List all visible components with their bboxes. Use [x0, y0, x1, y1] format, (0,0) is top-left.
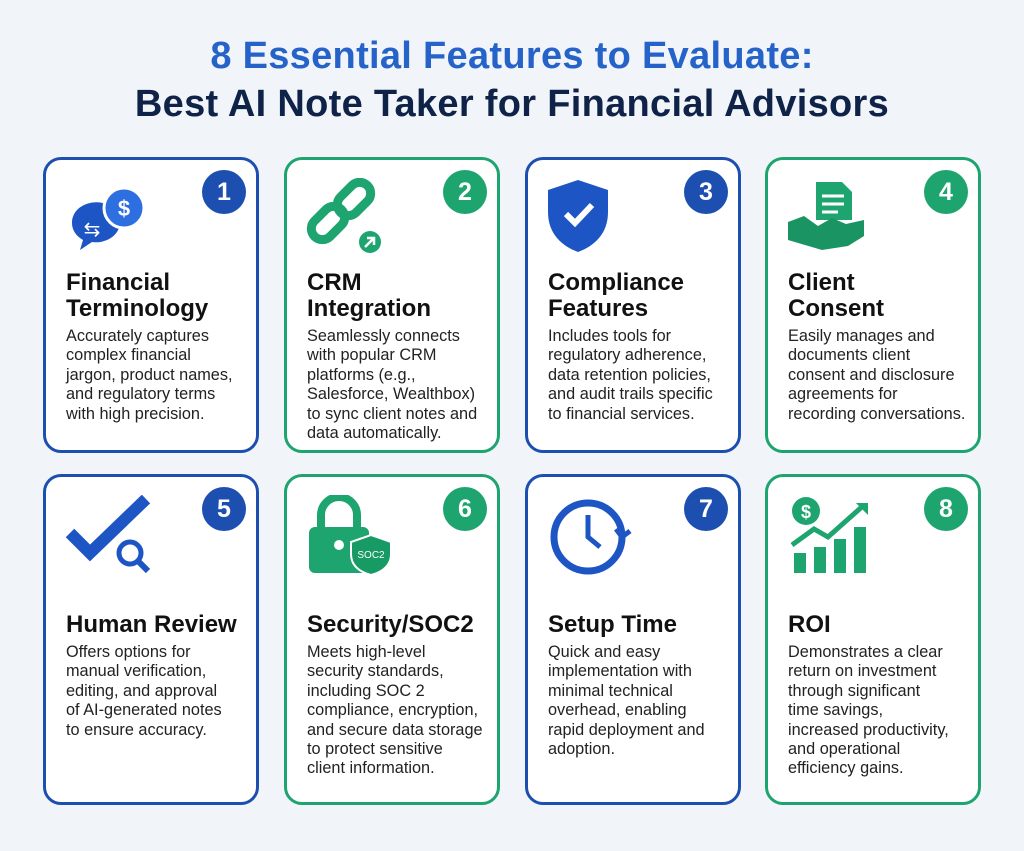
heading: Integration [307, 295, 431, 322]
body text: of AI-generated notes [66, 701, 222, 719]
panel: CRM integration [284, 157, 500, 453]
heading: Consent [788, 295, 884, 322]
icon: growth chart: $ [801, 502, 811, 522]
body text: platforms (e.g., [307, 366, 416, 384]
body text [307, 643, 483, 777]
badge 7 [684, 487, 728, 531]
icon: chain link [306, 178, 381, 253]
body text: Meets high-level [307, 643, 426, 661]
body text: to sync client notes and [307, 405, 477, 423]
badge 4: 4 [939, 178, 953, 206]
body text: Accurately captures [66, 327, 209, 345]
badge 5: 5 [217, 495, 231, 523]
heading [307, 269, 431, 322]
body text: efficiency gains. [788, 759, 904, 777]
body text: and secure data storage [307, 721, 483, 739]
body text: Seamlessly connects [307, 327, 460, 345]
body text [548, 643, 705, 758]
icon: padlock with shield [309, 495, 390, 574]
panel: human review [43, 474, 259, 805]
body text: implementation with [548, 662, 692, 680]
body text [307, 327, 477, 442]
badge 1 [202, 170, 246, 214]
body text: recording conversations. [788, 405, 965, 423]
body text: security standards, [307, 662, 444, 680]
body text: regulatory adherence, [548, 346, 706, 364]
body text: overhead, enabling [548, 701, 687, 719]
body text: to financial services. [548, 405, 695, 423]
icon: padlock with shield: SOC2 [357, 550, 385, 561]
body text [548, 327, 713, 423]
body text [66, 643, 222, 739]
body text: rapid deployment and [548, 721, 705, 739]
body text: complex financial [66, 346, 191, 364]
badge 4 [924, 170, 968, 214]
body text: adoption. [548, 740, 615, 758]
body text: and regulatory terms [66, 385, 215, 403]
title [135, 35, 889, 125]
heading [548, 269, 684, 322]
body text: and operational [788, 740, 900, 758]
body text: client information. [307, 759, 435, 777]
badge 8: 8 [939, 495, 953, 523]
body text: compliance, encryption, [307, 701, 478, 719]
body text: manual verification, [66, 662, 206, 680]
body text: through significant [788, 682, 920, 700]
body text: with high precision. [66, 405, 204, 423]
heading: CRM [307, 269, 362, 296]
heading: Security/SOC2 [307, 611, 474, 638]
heading: ROI [788, 611, 831, 638]
icon: chat bubbles: $ [118, 196, 130, 221]
panel: financial terminology [43, 157, 259, 453]
body text: to ensure accuracy. [66, 721, 207, 739]
badge 8 [924, 487, 968, 531]
body text [788, 643, 949, 777]
icon: chat bubbles: ⇆ [84, 219, 100, 241]
badge 5 [202, 487, 246, 531]
body text: Quick and easy [548, 643, 660, 661]
icon: clock [550, 500, 632, 574]
body text: to protect sensitive [307, 740, 443, 758]
icon: chat bubbles [72, 190, 142, 250]
body text: Salesforce, Wealthbox) [307, 385, 475, 403]
panel: security [284, 474, 500, 805]
body text: data retention policies, [548, 366, 711, 384]
icon: growth chart [790, 497, 868, 573]
heading: Compliance [548, 269, 684, 296]
body text [66, 327, 233, 423]
heading: Setup Time [548, 611, 677, 638]
badge 2: 2 [458, 178, 472, 206]
body text: and audit trails specific [548, 385, 713, 403]
panel: setup time [525, 474, 741, 805]
panel: client consent [765, 157, 981, 453]
body text: jargon, product names, [66, 366, 233, 384]
body text: Demonstrates a clear [788, 643, 943, 661]
body text: increased productivity, [788, 721, 949, 739]
heading [788, 269, 884, 322]
body text: editing, and approval [66, 682, 217, 700]
body text [788, 327, 965, 423]
body text: data automatically. [307, 424, 442, 442]
icon: document handshake [788, 182, 864, 250]
badge 1: 1 [217, 178, 231, 206]
heading: Financial [66, 269, 170, 296]
panel: ROI [765, 474, 981, 805]
title line 2: Best AI Note Taker for Financial Advisors [135, 83, 889, 125]
body text: including SOC 2 [307, 682, 425, 700]
body text: minimal technical [548, 682, 673, 700]
icon: check with magnifier [66, 495, 150, 574]
body text: documents client [788, 346, 910, 364]
body text: Easily manages and [788, 327, 935, 345]
body text: with popular CRM [307, 346, 436, 364]
body text: return on investment [788, 662, 936, 680]
title line 1: 8 Essential Features to Evaluate: [210, 35, 814, 77]
badge 3 [684, 170, 728, 214]
badge 6: 6 [458, 495, 472, 523]
badge 3: 3 [699, 178, 713, 206]
badge 6 [443, 487, 487, 531]
panel: compliance [525, 157, 741, 453]
heading: Features [548, 295, 648, 322]
badge 2 [443, 170, 487, 214]
icon: shield [548, 180, 608, 252]
badge 7: 7 [699, 495, 713, 523]
body text: Includes tools for [548, 327, 671, 345]
heading: Client [788, 269, 855, 296]
body text: consent and disclosure [788, 366, 955, 384]
heading: Terminology [66, 295, 208, 322]
body text: time savings, [788, 701, 883, 719]
body text: agreements for [788, 385, 898, 403]
heading [66, 269, 208, 322]
heading: Human Review [66, 611, 237, 638]
body text: Offers options for [66, 643, 191, 661]
